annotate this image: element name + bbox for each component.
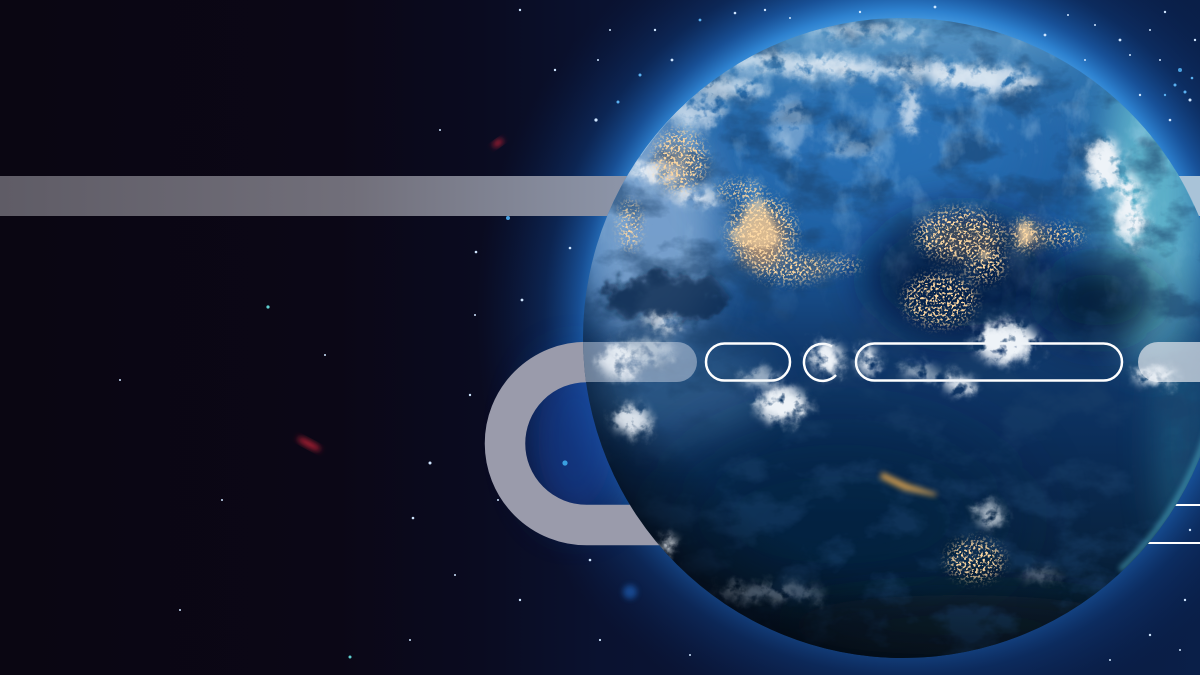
bright light patches <box>728 197 1034 496</box>
earth globe <box>580 16 1200 658</box>
translucent top stroke of C over globe <box>580 342 697 382</box>
right translucent pill <box>1138 342 1200 382</box>
dark land: Arabian sea edge <box>600 273 730 321</box>
city lights <box>620 130 1084 580</box>
bottom right lines <box>1140 505 1200 543</box>
teal lower-right rim <box>1116 436 1200 574</box>
outline pill two <box>856 344 1122 380</box>
top grey bar <box>0 176 640 216</box>
distant red nebulae <box>296 138 504 453</box>
surface mottling <box>583 18 1200 658</box>
soft glow of cities <box>659 143 1044 274</box>
clouds <box>600 25 1177 598</box>
limb light rim <box>640 72 1194 206</box>
globe shading <box>580 18 1200 655</box>
outline pill one <box>706 344 790 380</box>
limb darkening on lower left <box>583 280 1018 658</box>
grey C shape behind globe <box>505 362 680 525</box>
right edge bar stub <box>1170 176 1200 216</box>
outline open circle <box>804 344 836 381</box>
